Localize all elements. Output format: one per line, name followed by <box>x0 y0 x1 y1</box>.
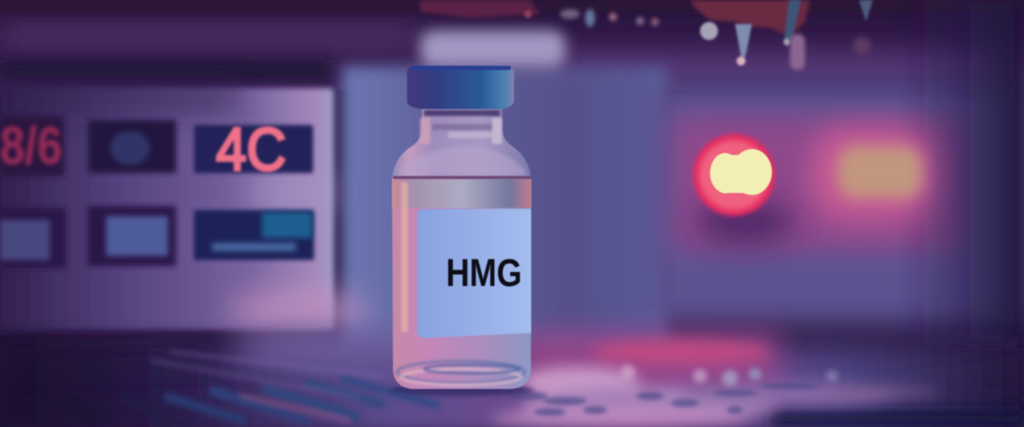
display: temperature 4C <box>194 116 313 183</box>
panel: refrigerator control panel <box>0 84 370 336</box>
display: lower middle <box>88 206 176 266</box>
vial neck and shoulder <box>392 108 531 208</box>
left highlight <box>401 182 408 332</box>
vial body shadow <box>390 384 534 396</box>
display: temperature 4C: 4C <box>216 116 286 183</box>
shelf: frosted wire rack <box>0 328 1024 427</box>
rack bars <box>60 352 440 421</box>
display: date readout: 8/6 <box>0 116 62 176</box>
icon: blurred second light <box>812 128 930 220</box>
display: lower right <box>194 210 314 260</box>
vial <box>390 66 534 396</box>
panel: blurred alarm unit <box>650 0 1024 345</box>
snow on rack <box>490 367 940 426</box>
frost and icicles <box>420 0 873 70</box>
liquid and lower glass <box>392 178 531 389</box>
display: blurred readout <box>88 120 176 173</box>
display: lower left <box>0 208 66 268</box>
label text: HMG: HMG <box>446 252 522 295</box>
cap <box>407 66 514 109</box>
icon: alarm light <box>693 134 795 244</box>
frost on shoulder <box>398 146 526 176</box>
meniscus band <box>393 179 531 208</box>
label <box>417 209 531 338</box>
vial base rings <box>397 361 525 385</box>
